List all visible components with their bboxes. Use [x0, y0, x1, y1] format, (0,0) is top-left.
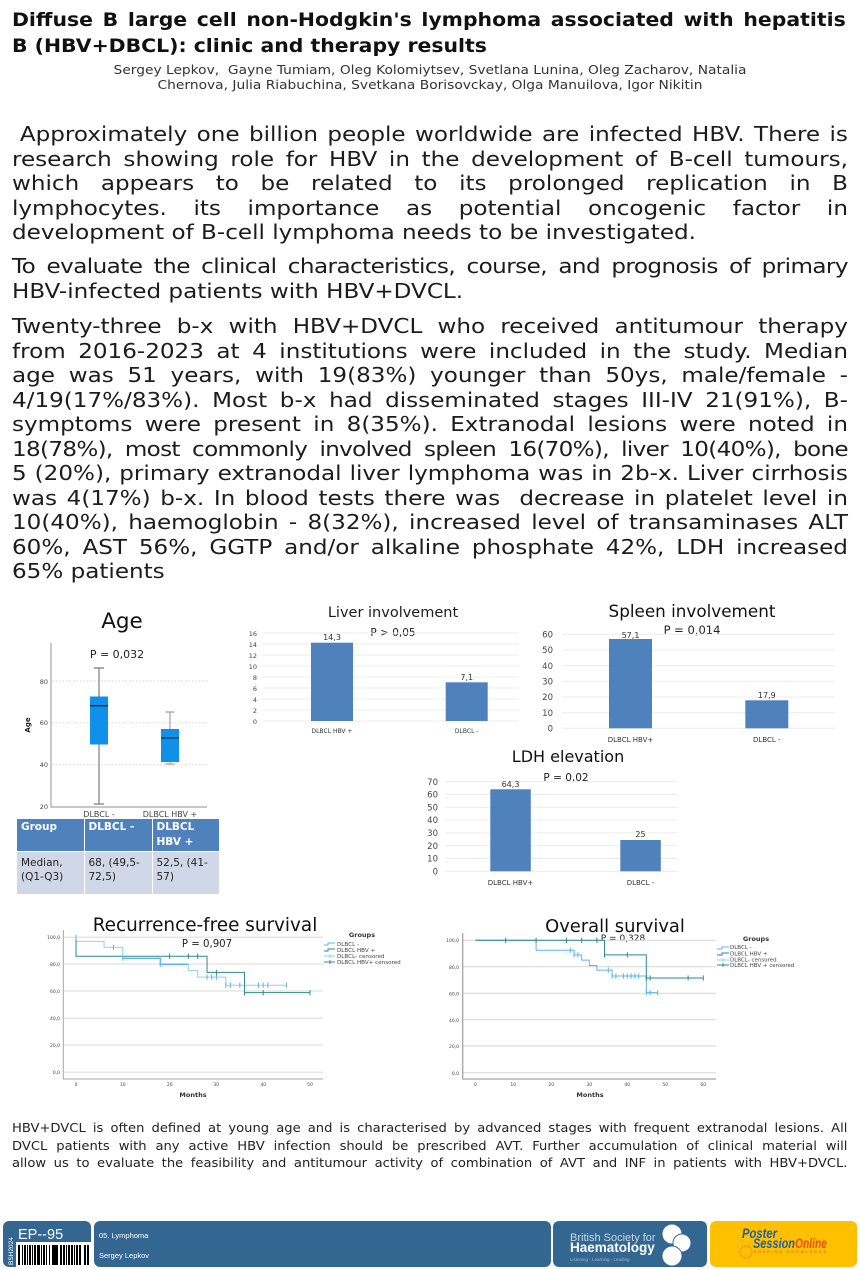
- chart: LDH elevation: 64,3: [502, 780, 519, 789]
- chart: recurrence-free survival: 40: [260, 1082, 266, 1088]
- chart: spleen involvement: DLBCL -: [753, 736, 781, 744]
- chart: recurrence-free survival: 40,0: [50, 1016, 60, 1022]
- chart: LDH elevation: DLBCL -: [627, 879, 655, 887]
- chart: spleen involvement: DLBCL HBV+: [608, 736, 653, 744]
- chart: spleen involvement: 0: [548, 724, 553, 734]
- box: DLBCL -: [90, 668, 108, 804]
- table: median age by group: 52,5, (41-57): [156, 856, 208, 883]
- chart: recurrence-free survival: 0,0: [53, 1070, 60, 1076]
- table: median age by group: 68, (49,5-72,5): [88, 856, 140, 883]
- chart: age box plot: Age: [24, 717, 32, 733]
- chart: LDH elevation: 60: [427, 790, 438, 800]
- text block: conclusion: HBV+DVCL is often defined at young age and is characterised by advanced stages with frequent extranodal lesions. All: [12, 1121, 847, 1135]
- legend: OS groups: [717, 935, 794, 969]
- footer: British Society for Haematology logo: British Society for: [570, 1232, 656, 1244]
- text block: methods and results: [12, 314, 848, 583]
- p-value: spleen: P = 0,014: [664, 623, 720, 637]
- chart: overall survival: 0: [474, 1082, 477, 1088]
- chart: liver involvement: 12: [249, 652, 257, 660]
- legend: RFS groups: DLBCL- censored: [337, 954, 385, 960]
- legend: RFS groups: [324, 931, 401, 966]
- text block: aim: [12, 254, 848, 303]
- footer: category and author bar: [94, 1221, 551, 1267]
- chart: recurrence-free survival: 100,0: [47, 935, 60, 941]
- chart: recurrence-free survival: 50: [307, 1082, 313, 1088]
- chart: overall survival: 60,0: [449, 992, 459, 998]
- heading: Age: Age: [101, 609, 143, 634]
- chart: overall survival: 40,0: [449, 1018, 459, 1024]
- footer: Poster Session Online logo: SHARING KNOWLEDGE: [754, 1250, 827, 1254]
- chart: LDH elevation: 30: [427, 829, 438, 839]
- chart: liver involvement: 8: [253, 674, 257, 682]
- legend: RFS groups: DLBCL HBV+ censored: [337, 960, 401, 966]
- text block: background: Approximately one billion people worldwide are infected HBV. There is: [20, 122, 848, 146]
- chart: liver involvement: 7,1: [460, 673, 473, 682]
- text block: conclusion: DVCL patients with any active HBV infection should be prescribed AVT. Further accumulation of clinical material will: [12, 1138, 847, 1152]
- heading: LDH: LDH elevation: [512, 747, 624, 766]
- text block: background: [12, 122, 848, 244]
- chart: age box plot: 40: [40, 761, 48, 769]
- chart: LDH elevation: 50: [427, 804, 438, 814]
- footer: category and author bar: 05. Lymphoma: [99, 1231, 149, 1240]
- text block: methods and results: 4/19(17%/83%). Most b-x had disseminated stages III-IV 21(91%), B-: [12, 388, 848, 412]
- chart: liver involvement: 10: [249, 663, 257, 671]
- chart: overall survival: [446, 916, 794, 1099]
- text block: aim: To evaluate the clinical characteristics, course, and prognosis of primary: [12, 254, 848, 278]
- chart: LDH elevation: 0: [433, 868, 438, 878]
- text block: methods and results: Twenty-three b-x with HBV+DVCL who received antitumour therapy: [12, 314, 848, 338]
- footer: Poster Session Online logo: Online: [795, 1235, 827, 1251]
- chart: recurrence-free survival: 10: [120, 1082, 126, 1088]
- footer: British Society for Haematology logo: Listening · Learning · Leading: [570, 1257, 630, 1262]
- chart: overall survival: 60: [700, 1082, 706, 1088]
- heading: liver: Liver involvement: [328, 605, 458, 621]
- chart: age box plot: 80: [40, 678, 48, 686]
- chart: spleen involvement: 20: [542, 693, 553, 703]
- authors: Chernova, Julia Riabuchina, Svetkana Borisovckay, Olga Manuilova, Igor Nikitin: [158, 77, 702, 92]
- chart: liver involvement: 6: [253, 685, 257, 693]
- text block: background: research showing role for HBV in the development of B-cell tumours,: [12, 147, 848, 171]
- authors: [114, 62, 746, 92]
- chart: age box plot: DLBCL HBV +: [143, 810, 197, 819]
- text block: methods and results: 5 (20%), primary extranodal liver lymphoma was in 2b-x. Liver cirrhosis: [12, 461, 848, 485]
- legend: RFS groups: DLBCL HBV +: [337, 948, 375, 954]
- heading: spleen: Spleen involvement: [609, 601, 776, 621]
- footer: Poster Session Online logo: Poster: [742, 1225, 778, 1241]
- chart: spleen involvement: 57,1: [622, 631, 639, 640]
- chart: LDH elevation: 25: [635, 830, 646, 839]
- chart: age box plot: DLBCL -: [83, 810, 115, 819]
- legend: OS groups: DLBCL HBV +: [730, 952, 768, 958]
- legend: RFS groups: Groups: [349, 931, 375, 939]
- chart: spleen involvement: 60: [542, 630, 553, 640]
- chart: age box plot: [24, 609, 208, 819]
- chart: spleen involvement: [542, 601, 835, 744]
- barcode: [18, 1245, 89, 1265]
- chart: spleen involvement: 17,9: [758, 691, 776, 700]
- icon: three circles: [662, 1224, 691, 1266]
- text block: methods and results: from 2016-2023 at 4 institutions were included in the study. Median: [12, 339, 848, 363]
- chart: LDH elevation: 40: [427, 816, 438, 826]
- chart: recurrence-free survival: 20,0: [50, 1043, 60, 1049]
- p-value: RFS: P = 0,907: [182, 939, 232, 950]
- chart: recurrence-free survival: [47, 915, 401, 1099]
- chart: liver involvement: DLBCL -: [455, 728, 478, 735]
- chart: LDH elevation: [427, 747, 677, 887]
- footer: poster id tab: [3, 1221, 91, 1267]
- footer: poster id tab: BSH2024: [8, 1237, 15, 1265]
- table: median age by group: Median, (Q1-Q3): [21, 856, 63, 883]
- heading: overall survival: Overall survival: [545, 916, 685, 937]
- text block: background: which appears to be related to its prolonged replication in B: [12, 171, 848, 195]
- chart: recurrence-free survival: 20: [167, 1082, 173, 1088]
- chart: LDH elevation: 70: [427, 778, 438, 788]
- chart: overall survival: 80,0: [449, 965, 459, 971]
- chart: overall survival: 100,0: [446, 938, 459, 944]
- text block: background: lymphocytes. its importance as potential oncogenic factor in: [12, 196, 848, 220]
- chart: recurrence-free survival: Months: [179, 1091, 207, 1099]
- chart: liver involvement: 4: [253, 696, 257, 704]
- chart: spleen involvement: 50: [542, 646, 553, 656]
- chart: liver involvement: 0: [253, 718, 257, 726]
- p-value: liver: P > 0,05: [370, 627, 416, 639]
- chart: overall survival: 30: [586, 1082, 592, 1088]
- text block: methods and results: age was 51 years, with 19(83%) younger than 50ys, male/female -: [12, 363, 848, 387]
- footer: poster id tab: EP--95: [18, 1227, 63, 1243]
- table: median age by group: [17, 819, 219, 894]
- legend: OS groups: DLBCL -: [730, 945, 752, 951]
- chart: overall survival: 0,0: [452, 1071, 459, 1077]
- text block: methods and results: 65% patients: [12, 559, 165, 583]
- title: Diffuse B large cell non-Hodgkin's lymphoma associated with hepatitis: [12, 9, 846, 31]
- text block: methods and results: 18(78%), most commonly involved spleen 16(70%), liver 10(40%), bone: [12, 437, 848, 461]
- chart: overall survival: Months: [576, 1091, 604, 1099]
- text block: background: development of B-cell lymphoma needs to be investigated.: [12, 220, 696, 244]
- text block: aim: HBV-infected patients with HBV+DVCL.: [12, 279, 463, 303]
- legend: OS groups: DLBCL HBV + censored: [730, 963, 794, 969]
- text block: methods and results: was 4(17%) b-x. In blood tests there was decrease in platelet level in: [12, 486, 848, 510]
- chart: spleen involvement: 40: [542, 662, 553, 672]
- table: median age by group: DLBCL HBV +: [156, 821, 194, 848]
- footer: Poster Session Online logo: Session: [753, 1235, 795, 1251]
- chart: recurrence-free survival: 80,0: [50, 962, 60, 968]
- chart: LDH elevation: DLBCL HBV+: [488, 879, 533, 887]
- chart: LDH elevation: 20: [427, 842, 438, 852]
- chart: liver involvement: [249, 605, 519, 735]
- chart: overall survival: 40: [624, 1082, 630, 1088]
- text block: methods and results: 60%, AST 56%, GGTP and/or alkaline phosphate 42%, LDH increased: [12, 535, 848, 559]
- chart: overall survival: 10: [510, 1082, 516, 1088]
- text block: conclusion: [12, 1121, 847, 1170]
- chart: LDH elevation: 10: [427, 854, 438, 864]
- text block: conclusion: allow us to evaluate the feasibility and antitumour activity of combination of AVT and INF in patients with HBV+DVCL.: [12, 1156, 847, 1170]
- text block: methods and results: symptoms were present in 8(35%). Extranodal lesions were noted in: [12, 412, 848, 436]
- chart: overall survival: 20: [548, 1082, 554, 1088]
- p-value: OS: P = 0,328: [601, 934, 645, 944]
- title: [12, 9, 846, 57]
- chart: liver involvement: 16: [249, 630, 257, 638]
- authors: Sergey Lepkov, Gayne Tumiam, Oleg Kolomiytsev, Svetlana Lunina, Oleg Zacharov, Natalia: [114, 62, 746, 77]
- p-value: LDH: P = 0,02: [543, 772, 589, 784]
- chart: spleen involvement: 10: [542, 709, 553, 719]
- legend: RFS groups: DLBCL -: [337, 942, 359, 948]
- chart: recurrence-free survival: 30: [213, 1082, 219, 1088]
- footer: category and author bar: Sergey Lepkov: [99, 1251, 149, 1260]
- footer: British Society for Haematology logo: Haematology: [570, 1240, 655, 1255]
- footer: British Society for Haematology logo: [553, 1221, 707, 1267]
- heading: recurrence-free survival: Recurrence-free survival: [93, 915, 317, 936]
- footer: [3, 1221, 857, 1267]
- legend: OS groups: DLBCL- censored: [730, 958, 777, 964]
- footer: Poster Session Online logo: [710, 1221, 857, 1267]
- table: median age by group: Group: [21, 821, 57, 833]
- chart: recurrence-free survival: 60,0: [50, 989, 60, 995]
- chart: age box plot: 20: [40, 803, 48, 811]
- text block: methods and results: 10(40%), haemoglobin - 8(32%), increased level of transaminases ALT: [12, 510, 848, 534]
- chart: spleen involvement: 30: [542, 678, 553, 688]
- chart: overall survival: 20,0: [449, 1044, 459, 1050]
- title: B (HBV+DBCL): clinic and therapy results: [12, 35, 487, 57]
- legend: OS groups: Groups: [743, 935, 769, 943]
- p-value: age: P = 0,032: [90, 648, 144, 661]
- chart: liver involvement: 14: [249, 641, 257, 649]
- chart: age box plot: 60: [40, 719, 48, 727]
- chart: recurrence-free survival: 0: [75, 1082, 78, 1088]
- box: DLBCL HBV +: [161, 712, 179, 764]
- chart: liver involvement: 2: [253, 707, 257, 715]
- chart: liver involvement: DLBCL HBV +: [312, 728, 352, 735]
- chart: overall survival: 50: [662, 1082, 668, 1088]
- chart: liver involvement: 14,3: [323, 633, 341, 642]
- table: median age by group: DLBCL -: [88, 821, 134, 833]
